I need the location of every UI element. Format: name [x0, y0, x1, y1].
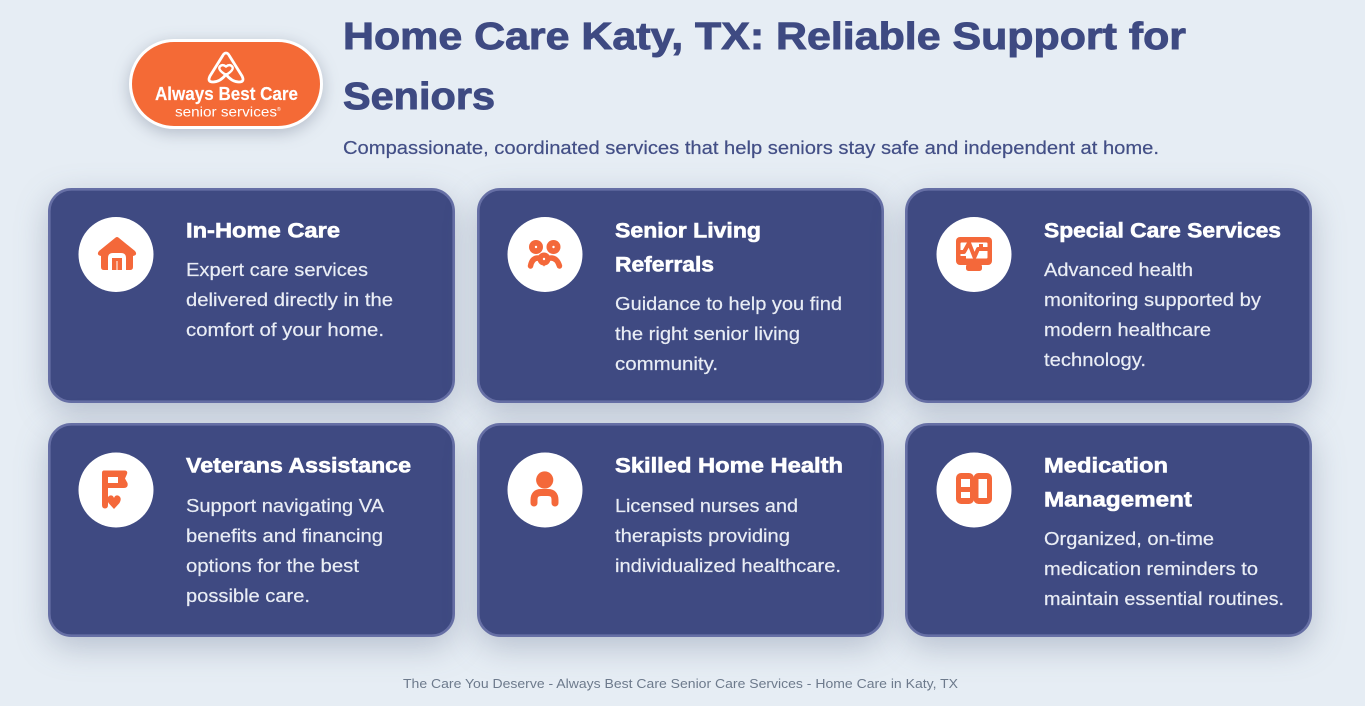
card text: [1044, 259, 1262, 370]
logo badge: ®: [277, 106, 281, 113]
logo badge: [130, 40, 322, 128]
card text: Organized, on-time: [1044, 528, 1214, 549]
card heading: Veterans Assistance: [186, 454, 411, 478]
card text: modern healthcare: [1044, 319, 1211, 340]
card heading: Referrals: [615, 254, 714, 276]
icon: person: [508, 452, 582, 528]
logo badge: senior services: [175, 104, 277, 120]
card text: possible care.: [186, 585, 310, 606]
footer caption: The Care You Deserve - Always Best Care Senior Care Services - Home Care in Katy, TX: [403, 676, 958, 691]
icon: medication: [936, 452, 1012, 528]
card text: Support navigating VA: [186, 495, 384, 516]
icon: group of people: [508, 217, 582, 292]
title: Home Care Katy, TX: Reliable Support for: [343, 16, 1186, 58]
card heading: Medication: [1044, 454, 1168, 478]
card heading: Skilled Home Health: [615, 454, 843, 478]
card text: benefits and financing: [186, 525, 383, 546]
card text: individualized healthcare.: [615, 555, 841, 576]
panel: Special Care Services: [906, 189, 1311, 402]
card text: [615, 495, 841, 576]
icon: health monitor: [936, 217, 1012, 292]
card heading: Management: [1044, 488, 1192, 512]
card text: Expert care services: [186, 259, 368, 280]
subtitle: Compassionate, coordinated services that help seniors stay safe and independent at home.: [343, 137, 1159, 158]
card text: [186, 495, 384, 606]
panel: Skilled Home Health: [478, 424, 883, 636]
card text: therapists providing: [615, 525, 790, 546]
icon: flag with heart: [78, 452, 154, 528]
icon: house: [78, 217, 154, 292]
card text: delivered directly in the: [186, 289, 393, 310]
panel: In-Home Care: [49, 189, 454, 402]
card text: maintain essential routines.: [1044, 588, 1284, 609]
card text: Licensed nurses and: [615, 495, 798, 516]
card heading: Senior Living: [615, 220, 761, 242]
panel: Veterans Assistance: [49, 424, 454, 636]
card text: technology.: [1044, 349, 1146, 370]
card heading: Special Care Services: [1044, 220, 1281, 242]
card text: the right senior living: [615, 323, 800, 344]
card text: [615, 293, 842, 374]
card text: [186, 259, 393, 340]
panel: Senior Living Referrals: [478, 189, 883, 402]
card heading: [615, 220, 761, 276]
card text: comfort of your home.: [186, 319, 384, 340]
card text: community.: [615, 353, 718, 374]
card text: medication reminders to: [1044, 558, 1258, 579]
card heading: In-Home Care: [186, 220, 340, 242]
panel: Medication Management: [906, 424, 1311, 636]
card heading: [1044, 454, 1192, 512]
title: Seniors: [343, 76, 495, 118]
card text: options for the best: [186, 555, 360, 576]
logo badge: Always Best Care: [155, 84, 298, 104]
card text: [1044, 528, 1284, 609]
title: [343, 16, 1186, 118]
card text: monitoring supported by: [1044, 289, 1262, 310]
card text: Advanced health: [1044, 259, 1193, 280]
card text: Guidance to help you find: [615, 293, 842, 314]
